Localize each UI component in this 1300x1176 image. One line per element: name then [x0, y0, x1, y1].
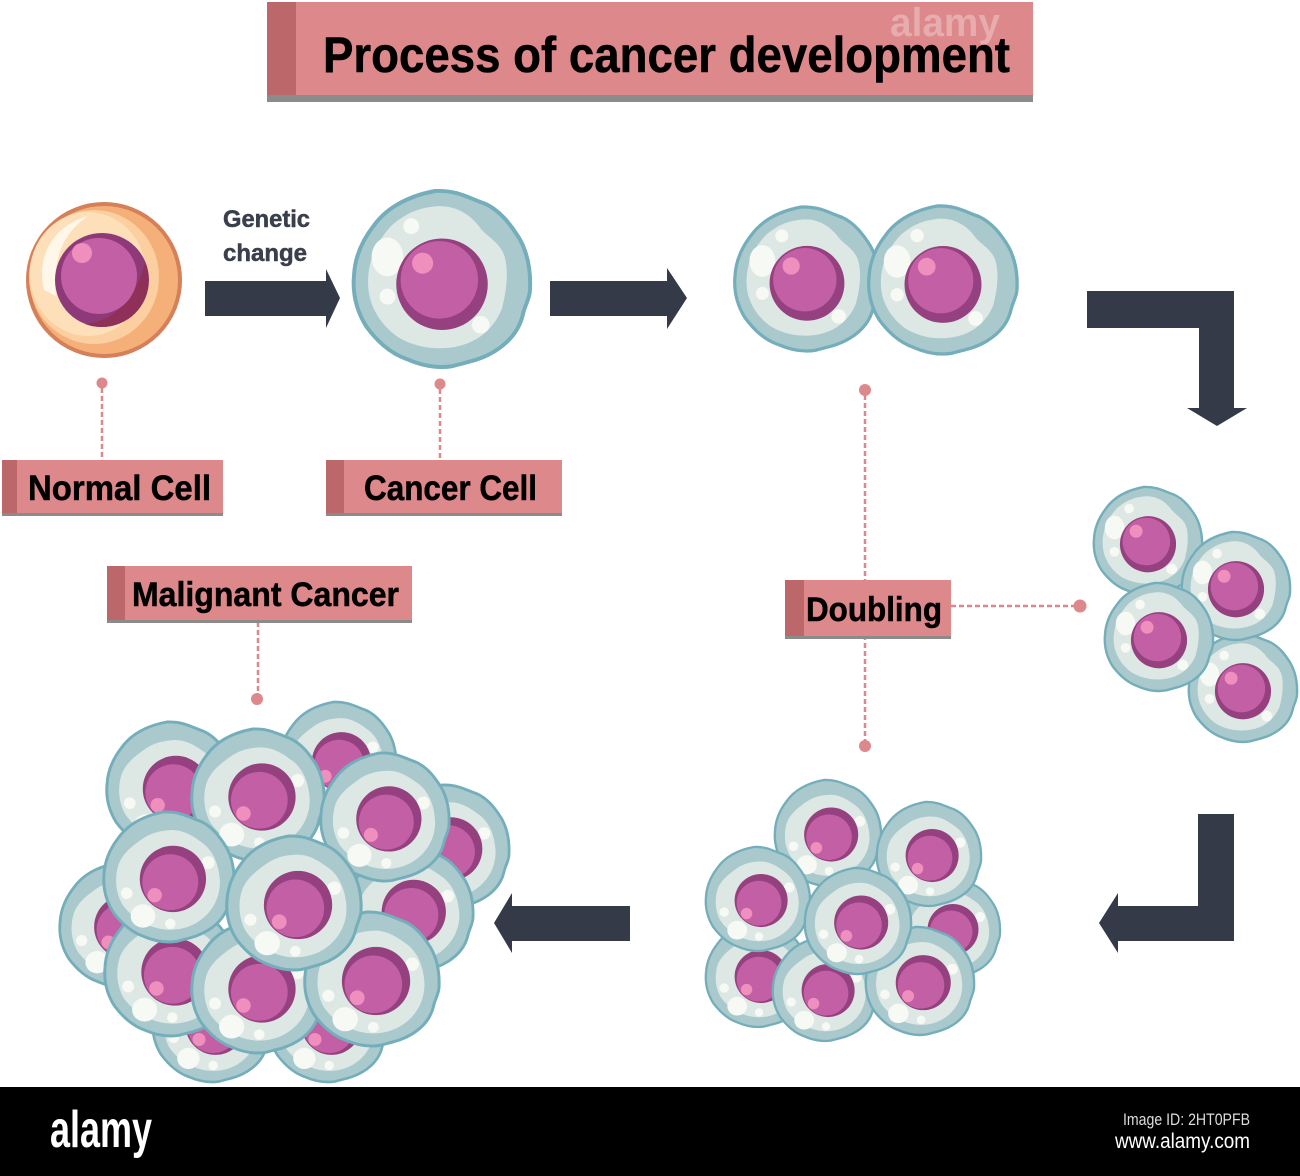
label: genetic change: change: [223, 240, 307, 267]
footer bar: alamy: [50, 1101, 152, 1159]
icon: cell cluster: [706, 780, 1000, 1041]
label: doubling: Doubling: [806, 591, 942, 629]
connectors: doubling: [859, 384, 1086, 752]
arrow: cancer cell to two cells: [550, 268, 687, 329]
connector: normal cell: [96, 378, 108, 460]
label: doubling: [785, 580, 951, 639]
footer bar: www.alamy.com: [1114, 1130, 1250, 1153]
label: normal cell: Normal Cell: [28, 469, 211, 508]
connector: malignant cancer: [251, 622, 263, 705]
arrow: cluster to malignant cancer: [494, 893, 630, 953]
icon: normal cell: [28, 204, 180, 356]
label: normal cell: [2, 460, 223, 516]
label: malignant cancer: [107, 566, 412, 623]
arrow: normal to cancer cell: [205, 269, 340, 328]
icon: malignant cancer tumour: [60, 702, 509, 1082]
icon: two dividing cells: [735, 206, 1017, 354]
label: cancer cell: Cancer Cell: [364, 469, 537, 508]
arrow: elbow down to four cells: [1087, 291, 1247, 426]
title banner: alamy: [890, 1, 1001, 45]
label: cancer cell: [326, 460, 562, 516]
footer bar: [0, 1087, 1300, 1176]
icon: four cells: [1094, 487, 1297, 742]
label: malignant cancer: Malignant Cancer: [132, 576, 399, 614]
icon: cancer cell: [354, 191, 530, 367]
title banner: [267, 1, 1033, 102]
arrow: elbow down-left to cluster: [1099, 814, 1234, 953]
footer bar: Image ID: 2HT0PFB: [1123, 1110, 1250, 1129]
connector: cancer cell: [434, 378, 446, 460]
title banner: Process of cancer development: [323, 27, 1010, 83]
label: genetic change: [223, 206, 310, 267]
label: genetic change: Genetic: [223, 206, 310, 233]
